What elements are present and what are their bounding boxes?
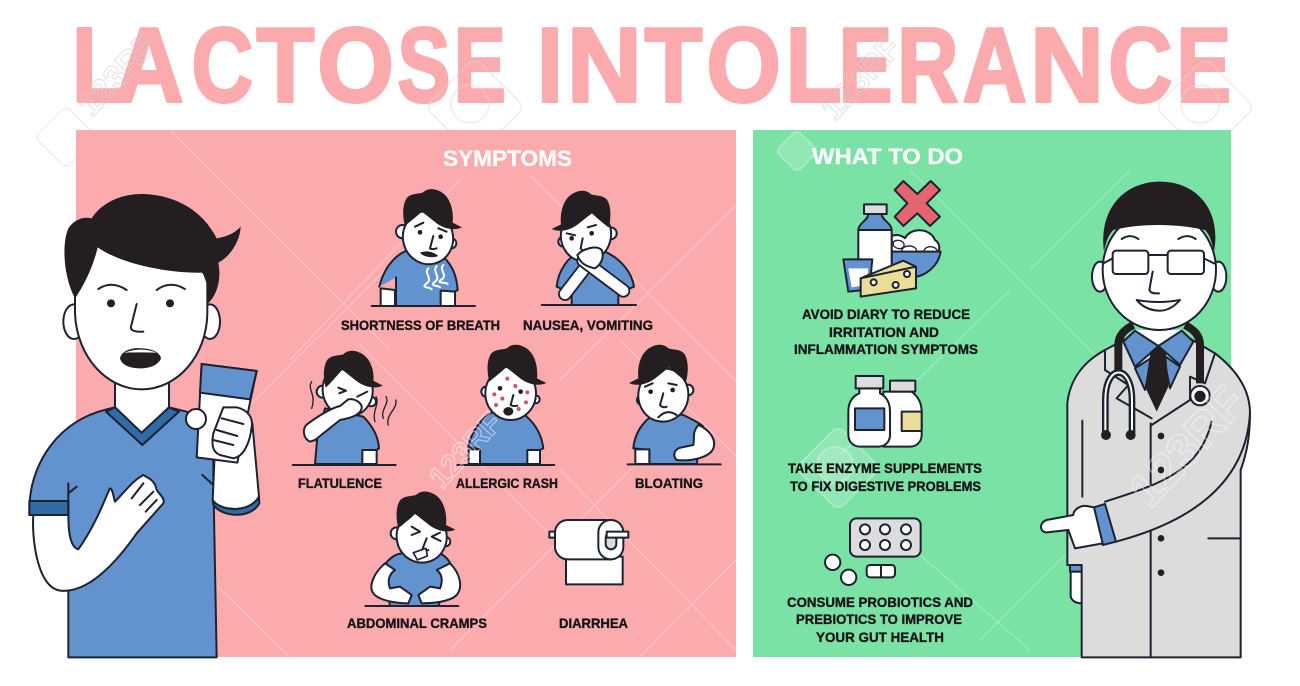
text: 123RF: [1119, 376, 1256, 518]
icon: dairy products crossed out: [843, 181, 941, 297]
title: A: [114, 6, 184, 124]
heading: symptoms: SYMPTOMS: [443, 146, 572, 171]
title: E: [1176, 6, 1231, 124]
patient figure holding a medicine tube: [29, 194, 259, 657]
symptom: bloating: [628, 345, 721, 464]
title: O: [317, 6, 394, 124]
panel: what to do background: [753, 130, 1231, 657]
symptom: shortness of breath: [372, 189, 475, 306]
title: C: [192, 6, 253, 124]
title: A: [962, 6, 1027, 124]
label: diarrhea: DIARRHEA: [559, 615, 628, 631]
icon: toilet paper (diarrhea): [549, 520, 628, 584]
label: allergic rash: ALLERGIC RASH: [456, 475, 558, 491]
text: 123RF: [423, 406, 509, 495]
label: flatulence: FLATULENCE: [298, 475, 382, 491]
text: avoid dairy: IRRITATION AND: [829, 324, 939, 340]
text: probiotics: [787, 594, 973, 645]
panel: symptoms background: [76, 130, 736, 657]
text: probiotics: CONSUME PROBIOTICS AND: [787, 594, 973, 610]
icon: blister pack and pills: [825, 518, 921, 585]
text: 123RF: [813, 29, 908, 127]
title: E: [839, 6, 892, 124]
title: S: [397, 6, 450, 124]
icon: supplement bottles: [848, 376, 922, 447]
symptom: allergic rash: [457, 345, 554, 465]
label: bloating: BLOATING: [635, 475, 703, 491]
label: shortness of breath: SHORTNESS OF BREATH: [341, 317, 500, 333]
text: enzyme supplements: TAKE ENZYME SUPPLEMENTS: [788, 460, 982, 476]
text: avoid dairy: AVOID DIARY TO REDUCE: [802, 306, 970, 322]
title: N: [567, 6, 642, 124]
label: nausea, vomiting: NAUSEA, VOMITING: [523, 317, 653, 333]
title: R: [897, 6, 958, 124]
title: I: [537, 6, 563, 124]
symptom: flatulence: [293, 351, 396, 465]
doctor figure: [1041, 182, 1250, 657]
heading: what to do: WHAT TO DO: [812, 144, 963, 169]
title: T: [644, 6, 702, 124]
label: abdominal cramps: ABDOMINAL CRAMPS: [347, 615, 487, 631]
title: T: [256, 6, 314, 124]
title: O: [706, 6, 781, 124]
title: C: [1108, 6, 1172, 124]
text: probiotics: PREBIOTICS TO IMPROVE: [796, 611, 962, 627]
text: probiotics: YOUR GUT HEALTH: [816, 629, 944, 645]
text: avoid dairy: [794, 306, 978, 357]
symptom: nausea, vomiting: [542, 191, 636, 305]
title: E: [454, 6, 506, 124]
text: enzyme supplements: TO FIX DIGESTIVE PROBLEMS: [790, 478, 981, 494]
text: enzyme supplements: [788, 460, 982, 494]
text: avoid dairy: INFLAMMATION SYMPTOMS: [794, 341, 978, 357]
symptom: abdominal cramps: [365, 491, 460, 606]
title: L: [72, 6, 126, 124]
title: L: [786, 6, 842, 124]
text: 123RF: [70, 25, 165, 123]
title: N: [1030, 6, 1104, 124]
